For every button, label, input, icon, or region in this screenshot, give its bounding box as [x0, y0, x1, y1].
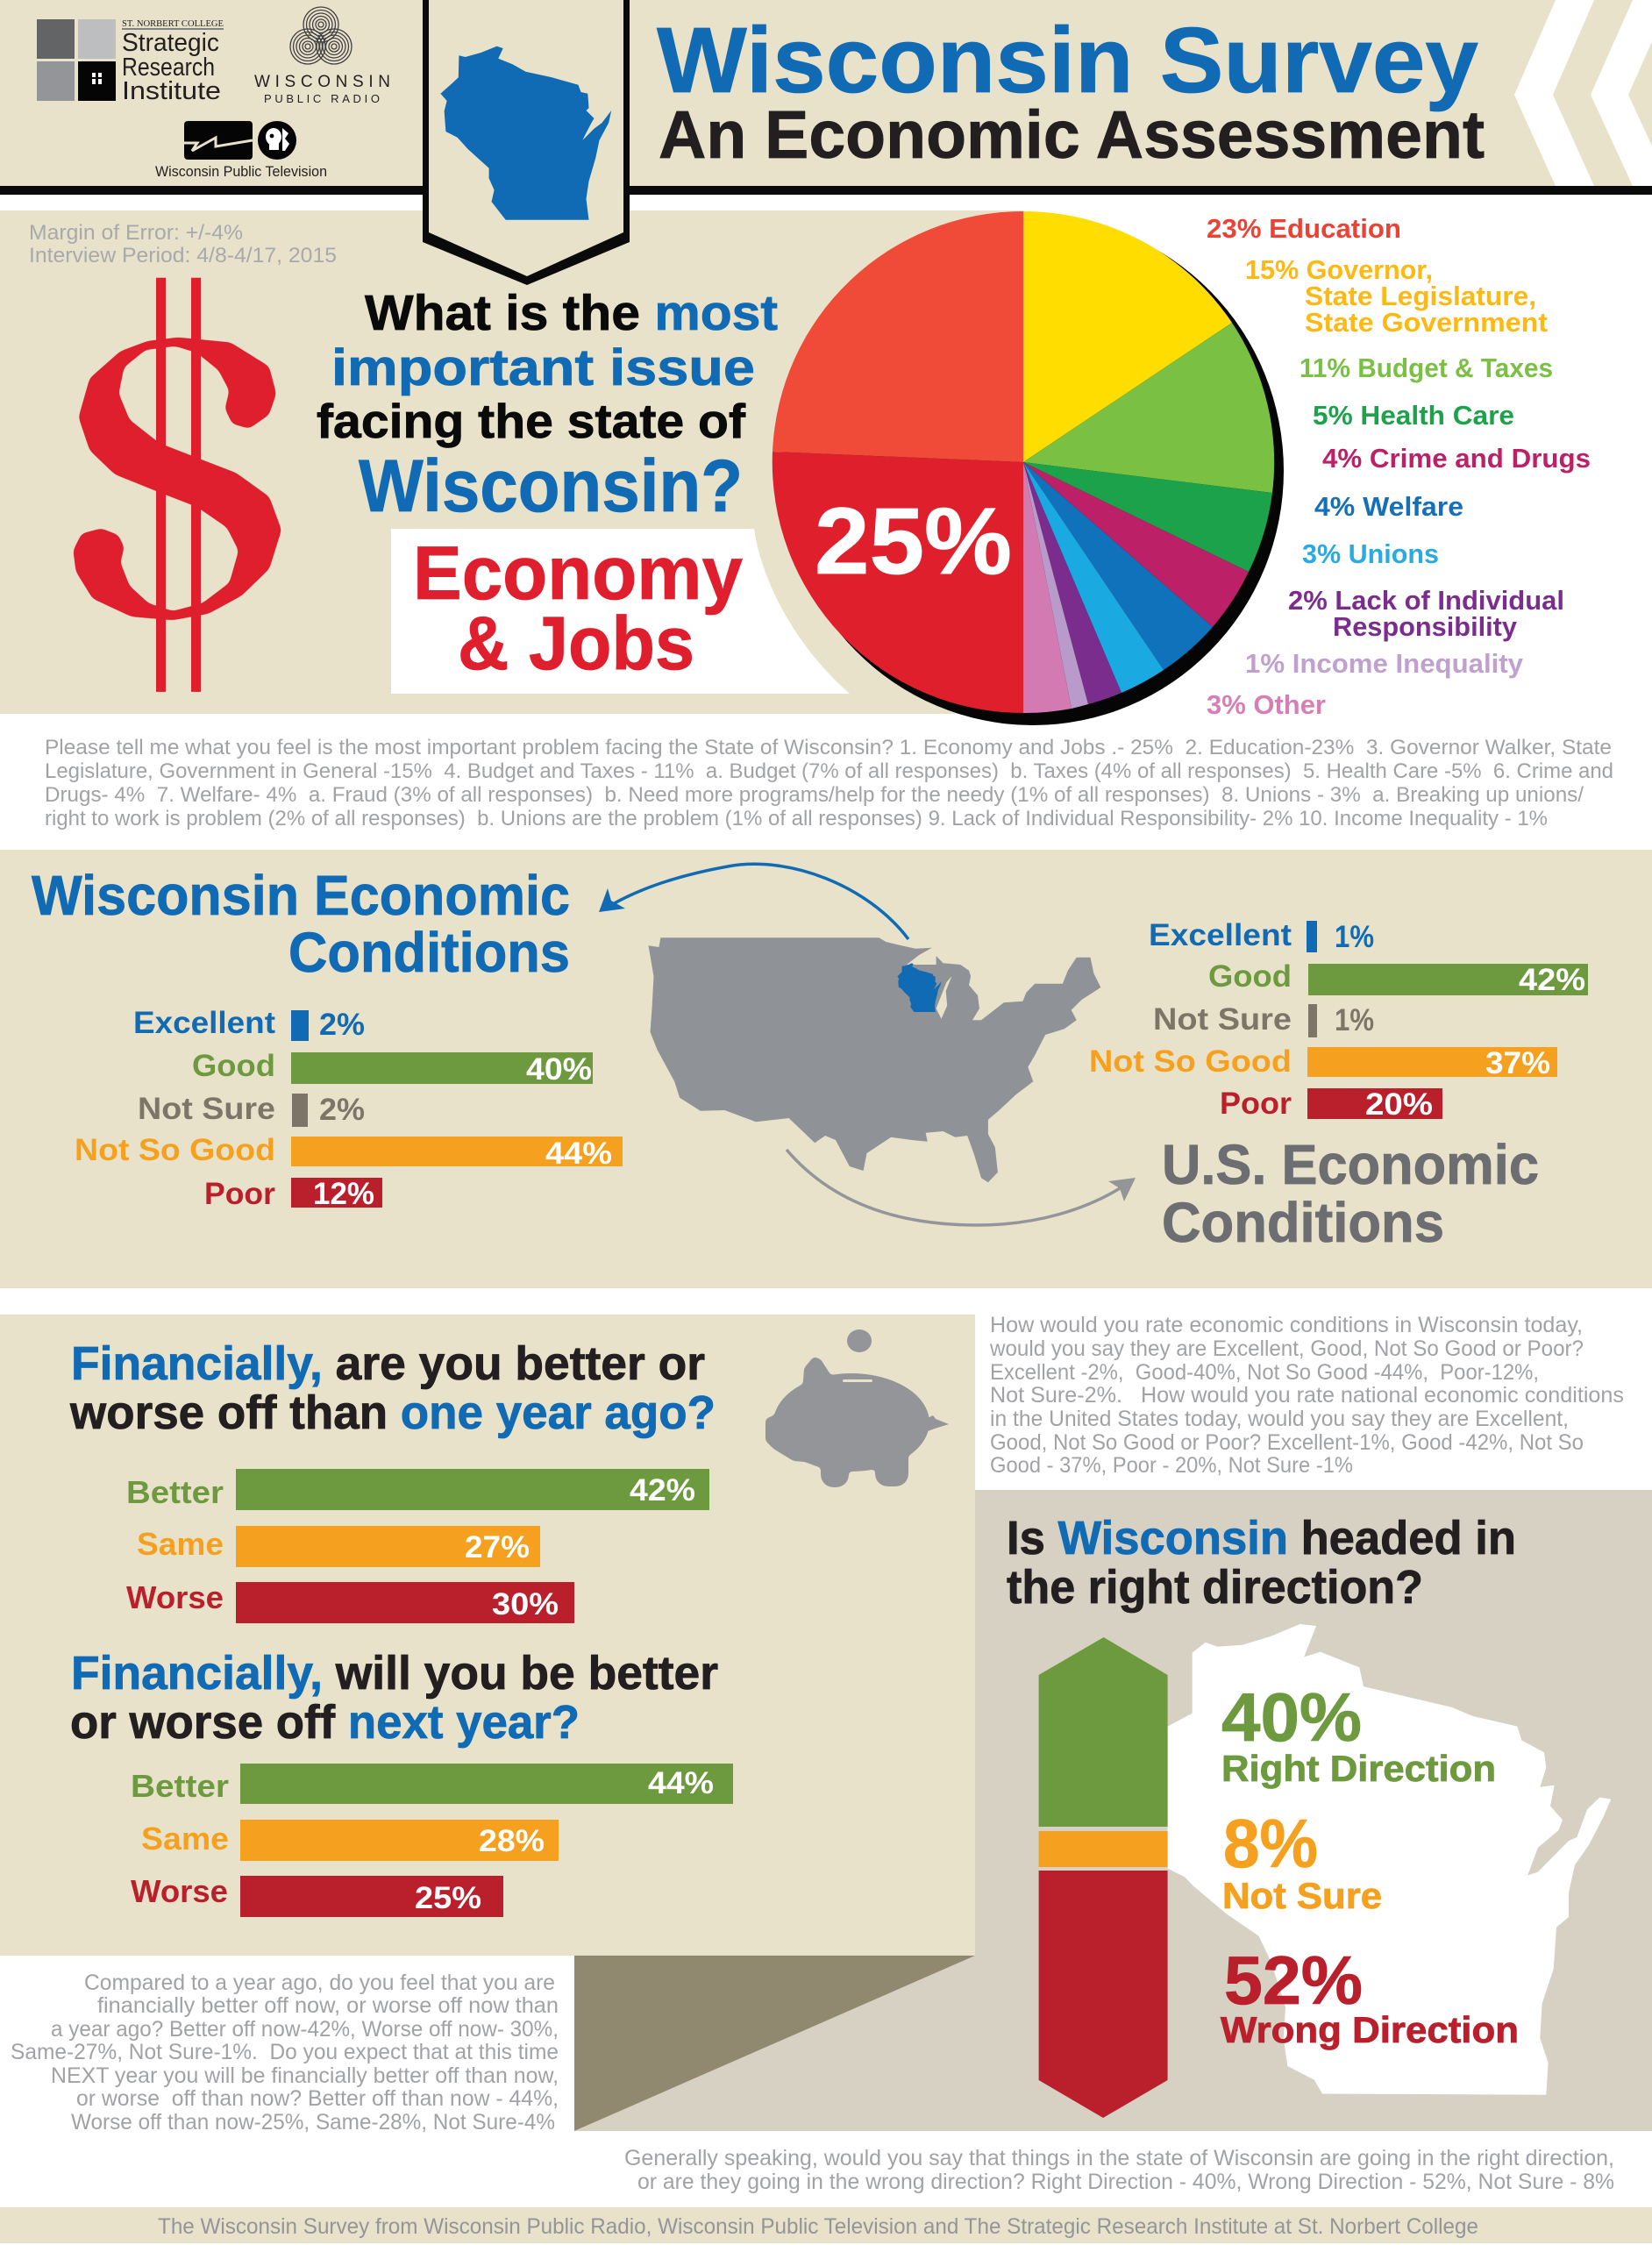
heading: right direction question — [1007, 1512, 1516, 1614]
heading: most important issue question: important issue — [331, 339, 755, 396]
decorative fold triangle — [574, 1956, 975, 2131]
bar: Not So Good 44% — [75, 1133, 623, 1171]
bar: Worse 25%: 25% — [415, 1881, 481, 1915]
text block: finances question wording: Same-27%, Not Sure-1%. Do you expect that at this time — [11, 2040, 559, 2064]
logo: Strategic Research Institute — [37, 18, 224, 105]
bar: Good 40% — [192, 1049, 593, 1087]
text block: economic conditions question wording — [989, 1313, 1624, 1478]
logo: Wisconsin Public Television — [155, 121, 327, 180]
pie chart: most important issue — [773, 211, 1284, 725]
text block: economic conditions question wording: How would you rate economic conditions in Wisconsin today, — [990, 1313, 1583, 1337]
survey margin of error note: Interview Period: 4/8-4/17, 2015 — [29, 244, 337, 267]
survey margin of error note: Margin of Error: +/-4% — [29, 221, 243, 245]
pie value: 25%: 25% — [815, 488, 1012, 594]
text block: finances question wording: Worse off than now-25%, Same-28%, Not Sure-4% — [71, 2110, 555, 2135]
text block: finances question wording — [11, 1971, 559, 2135]
bar: Not So Good 44%: Not So Good — [75, 1133, 275, 1167]
bar: Better 42%: Better — [126, 1474, 224, 1510]
pie legend: 3% Unions — [1302, 538, 1439, 569]
text block: economic conditions question wording: in the United States today, would you say they are Excellent, — [990, 1407, 1569, 1431]
bar: Not Sure 2%: Not Sure — [138, 1092, 275, 1126]
heading: Wisconsin Economic Conditions: Wisconsin Economic — [32, 864, 570, 927]
bar: Poor 12% — [204, 1177, 382, 1211]
heading: Wisconsin Economic Conditions — [32, 864, 570, 984]
bar chart: one year ago — [126, 1469, 709, 1623]
stat: 52% Wrong Direction: 52% — [1224, 1942, 1363, 2019]
pie legend: 3% Other — [1207, 689, 1326, 720]
logo: Wisconsin Public Radio: WISCONSIN — [254, 73, 390, 91]
bar: Excellent 2% — [133, 1006, 365, 1042]
icon: piggy bank — [765, 1329, 949, 1487]
bar: Not Sure 1% — [1153, 1002, 1374, 1037]
logo: Wisconsin Public Radio: PUBLIC RADIO — [264, 92, 380, 105]
bar: Excellent 1%: 1% — [1335, 920, 1374, 954]
heading: better or worse next year — [70, 1647, 718, 1749]
text block: issue question wording: Legislature, Government in General -15% 4. Budget and Taxes - 11% a. Budget (7% of all responses) b. Taxes (4% of all responses) 5. Health Care -5% 6. Crime and — [45, 759, 1613, 783]
bar: Poor 20%: Poor — [1220, 1087, 1292, 1121]
bar: Better 44%: Better — [131, 1768, 229, 1804]
heading: U.S. Economic Conditions — [1162, 1133, 1539, 1254]
bar: Better 42% — [126, 1469, 709, 1510]
heading: most important issue question: What is the most — [365, 285, 778, 341]
bar: Same 28%: 28% — [479, 1824, 545, 1858]
stat: 52% Wrong Direction: Wrong Direction — [1221, 2009, 1519, 2050]
stat: 40% Right Direction: Right Direction — [1221, 1748, 1496, 1789]
heading: right direction question: Is Wisconsin headed in — [1007, 1512, 1516, 1564]
icon: dollar sign — [74, 278, 281, 692]
bar: Excellent 2%: Excellent — [133, 1006, 275, 1040]
text block: economic conditions question wording: Not Sure-2%. How would you rate national economic conditions — [990, 1383, 1624, 1408]
heading: better or worse next year: Financially, will you be better — [71, 1647, 718, 1700]
title: Wisconsin Survey — [657, 9, 1478, 112]
bar: Good 40%: 40% — [526, 1052, 592, 1087]
bar: Good 42%: 42% — [1519, 963, 1585, 997]
text block: issue question wording: right to work is problem (2% of all responses) b. Unions are the problem (1% of all responses) 9. Lack of Individual Responsibility- 2% 10. Income Inequality - 1% — [45, 807, 1548, 830]
bar chart: U.S. economic conditions — [1089, 918, 1588, 1122]
map: Wisconsin silhouette — [1168, 1624, 1611, 2095]
panel: right direction background — [574, 1490, 1652, 2131]
stat: 8% Not Sure: Not Sure — [1222, 1875, 1382, 1916]
stat: 40% Right Direction: 40% — [1221, 1678, 1362, 1756]
text block: finances question wording: Compared to a year ago, do you feel that you are — [84, 1971, 555, 1995]
text block: issue question wording: Drugs- 4% 7. Welfare- 4% a. Fraud (3% of all responses) b. Need more programs/help for the needy (1% of all responses) 8. Unions - 3% a. Breaking up unions/ — [45, 783, 1584, 807]
text block: economic conditions question wording: Good, Not So Good or Poor? Excellent-1%, Good -42%, Not So — [990, 1430, 1584, 1455]
chevron arrows — [1514, 0, 1652, 186]
bar: Not So Good 37%: Not So Good — [1089, 1044, 1292, 1079]
pie legend: State Government — [1305, 307, 1548, 338]
bar chart: next year — [131, 1764, 733, 1917]
bar: Worse 30%: 30% — [492, 1587, 559, 1621]
heading: most important issue question: Wisconsin? — [359, 445, 743, 527]
title — [657, 9, 1485, 173]
bar: Good 42%: Good — [1208, 959, 1292, 994]
text block: issue question wording: Please tell me what you feel is the most important problem facing the State of Wisconsin? 1. Economy and Jobs .- 25% 2. Education-23% 3. Governor Walker, State — [45, 736, 1612, 759]
panel: economic conditions — [0, 850, 1652, 1288]
bar: Poor 12%: 12% — [313, 1177, 374, 1211]
bar: Not Sure 2%: 2% — [319, 1093, 365, 1127]
pie legend: 15% Governor, — [1245, 254, 1433, 285]
heading: right direction question: the right direction? — [1007, 1561, 1423, 1614]
banner: Wisconsin state shield — [423, 0, 630, 285]
logo: Wisconsin Public Television: Wisconsin Public Television — [155, 163, 327, 180]
bar: Better 42%: 42% — [630, 1473, 695, 1507]
bar: Not So Good 37%: 37% — [1485, 1046, 1550, 1080]
heading: better or worse than a year ago — [69, 1337, 716, 1439]
callout: Economy and Jobs: & Jobs — [458, 602, 694, 686]
bar: Poor 20% — [1220, 1087, 1442, 1122]
bar: Worse 30% — [126, 1579, 574, 1623]
text block: economic conditions question wording: Good - 37%, Poor - 20%, Not Sure -1% — [990, 1453, 1353, 1478]
panel: personal finances — [0, 1315, 975, 1956]
stat: 40% Right Direction — [1221, 1678, 1496, 1789]
bar: Same 27%: Same — [137, 1526, 224, 1562]
stat: 52% Wrong Direction — [1221, 1942, 1519, 2050]
text block: direction question wording: Generally speaking, would you say that things in the state of Wisconsin are going in the right direction, — [624, 2146, 1614, 2170]
pie legend: 5% Health Care — [1313, 400, 1514, 431]
logo: Strategic Research Institute: Research — [122, 53, 215, 82]
callout: Economy and Jobs — [391, 529, 850, 694]
text block: finances question wording: financially better off now, or worse off now than — [97, 1993, 559, 2018]
logo: Strategic Research Institute: ST. NORBERT COLLEGE — [122, 18, 224, 29]
heading: better or worse than a year ago: Financially, are you better or — [71, 1337, 705, 1390]
bar: Worse 30%: Worse — [126, 1579, 224, 1615]
pie legend: 4% Crime and Drugs — [1322, 443, 1591, 474]
arrow: map to Wisconsin heading — [599, 864, 908, 939]
bar: Worse 25%: Worse — [131, 1873, 228, 1909]
heading: U.S. Economic Conditions: U.S. Economic — [1162, 1133, 1539, 1196]
bar: Same 27% — [137, 1526, 540, 1567]
text block: finances question wording: or worse off than now? Better off than now - 44%, — [76, 2086, 559, 2111]
heading: most important issue question: facing the state of — [317, 394, 746, 448]
logo: Strategic Research Institute: Strategic — [122, 29, 219, 57]
stat: 8% Not Sure — [1222, 1805, 1382, 1916]
bar: Good 40%: Good — [192, 1049, 275, 1083]
text block: direction question wording: or are they going in the wrong direction? Right Direction - 40%, Wrong Direction - 52%, Not Sure - 8% — [637, 2170, 1614, 2194]
footer — [0, 2207, 1652, 2243]
text block: issue question wording — [45, 736, 1613, 830]
bar: Same 28% — [141, 1820, 559, 1861]
bar: Poor 20%: 20% — [1365, 1087, 1433, 1122]
bar: Poor 12%: Poor — [204, 1177, 275, 1211]
bar: Excellent 1% — [1149, 918, 1374, 954]
heading: better or worse next year: or worse off next year? — [70, 1696, 580, 1749]
pie legend: Responsibility — [1333, 611, 1518, 642]
header band — [0, 0, 1652, 195]
title: An Economic Assessment — [659, 97, 1485, 173]
text block: economic conditions question wording: would you say they are Excellent, Good, Not So Good or Poor? — [989, 1336, 1584, 1361]
map: United States with Wisconsin highlighted — [649, 937, 1100, 1182]
heading: U.S. Economic Conditions: Conditions — [1162, 1191, 1444, 1254]
text block: finances question wording: a year ago? Better off now-42%, Worse off now- 30%, — [51, 2017, 559, 2042]
text block: finances question wording: NEXT year you will be financially better off than now, — [51, 2063, 559, 2088]
text block: direction question wording — [624, 2146, 1614, 2194]
pie legend: 4% Welfare — [1314, 491, 1463, 522]
arrow: map to U.S. heading — [787, 1150, 1136, 1225]
bar: Excellent 1%: Excellent — [1149, 918, 1292, 952]
icon: Wisconsin map — [440, 46, 611, 220]
bar: Same 28%: Same — [141, 1821, 229, 1857]
heading: Wisconsin Economic Conditions: Conditions — [288, 921, 570, 984]
stat: 8% Not Sure: 8% — [1223, 1805, 1318, 1882]
logo: Wisconsin Public Radio — [254, 7, 390, 105]
callout: Economy and Jobs: Economy — [413, 531, 743, 616]
bar: Good 42% — [1208, 959, 1588, 997]
pie legend — [1207, 213, 1591, 720]
logo: Strategic Research Institute: Institute — [122, 77, 221, 105]
footer: The Wisconsin Survey from Wisconsin Public Radio, Wisconsin Public Television and The Strategic Research Institute at St. Norbert College — [158, 2214, 1478, 2239]
text block: economic conditions question wording: Excellent -2%, Good-40%, Not So Good -44%, Poor-12%, — [990, 1360, 1539, 1385]
survey margin of error note — [29, 221, 337, 267]
bar: Not Sure 2% — [138, 1092, 365, 1127]
pie legend: State Legislature, — [1305, 281, 1536, 311]
bar chart: Wisconsin economic conditions — [75, 1006, 623, 1211]
heading: most important issue question — [317, 285, 778, 527]
stacked arrow: direction results — [1039, 1637, 1168, 2118]
bar: Worse 25% — [131, 1873, 503, 1917]
icon: Wisconsin highlight — [897, 963, 941, 1012]
pie legend: 1% Income Inequality — [1245, 648, 1524, 679]
pie legend: 23% Education — [1207, 213, 1401, 244]
bar: Not So Good 37% — [1089, 1044, 1557, 1080]
bar: Better 44%: 44% — [648, 1766, 714, 1800]
panel: top issue background — [0, 210, 1023, 714]
bar: Not So Good 44%: 44% — [545, 1137, 612, 1171]
pie legend: 11% Budget & Taxes — [1300, 353, 1553, 383]
heading: better or worse than a year ago: worse off than one year ago? — [69, 1386, 716, 1439]
bar: Excellent 2%: 2% — [319, 1008, 365, 1042]
pie legend: 2% Lack of Individual — [1288, 585, 1564, 616]
bar: Not Sure 1%: Not Sure — [1153, 1002, 1292, 1037]
bar: Same 27%: 27% — [465, 1530, 530, 1564]
bar: Not Sure 1%: 1% — [1335, 1003, 1374, 1037]
bar: Better 44% — [131, 1764, 733, 1804]
